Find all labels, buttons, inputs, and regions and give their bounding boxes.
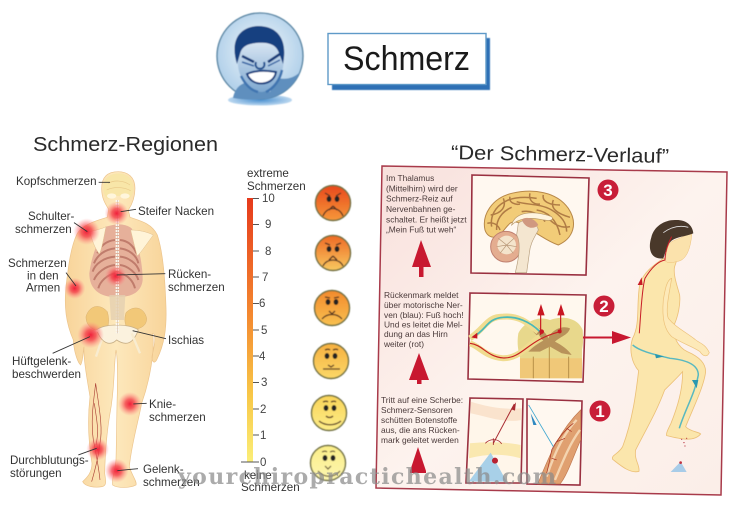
- box 2: spinal cord: [468, 293, 586, 382]
- pain scale bar: 2: [260, 404, 266, 416]
- step text 1: Schmerz-Sensoren: [381, 405, 453, 415]
- region labels: schmerzen: [168, 281, 225, 294]
- region labels: Hüftgelenk-: [12, 355, 71, 368]
- leader lines: [53, 182, 166, 471]
- step badges: 2: [599, 297, 609, 316]
- box 3: brain: [471, 175, 589, 275]
- arrows up: [409, 240, 431, 473]
- step text 3: Im Thalamus: [386, 173, 434, 183]
- step text 2: dung an das Hirn: [384, 329, 448, 339]
- step text 1: mark geleitet werden: [381, 435, 459, 445]
- step text 3: Schmerz-Reiz auf: [386, 194, 453, 204]
- pain scale bar: extreme: [247, 167, 289, 180]
- step text 3: [386, 173, 467, 234]
- pain scale bar: 0: [260, 457, 266, 469]
- body figure with pain regions: [53, 172, 166, 487]
- arrow: spinal cord to body: [583, 331, 631, 344]
- region labels: Armen: [26, 282, 60, 294]
- step text 1: [381, 395, 463, 445]
- region labels: [8, 175, 225, 489]
- pain scale bar: [241, 167, 306, 494]
- step text 2: Rückenmark meldet: [384, 290, 459, 300]
- title box: Schmerz: Schmerz: [343, 40, 470, 78]
- region labels: Kopfschmerzen: [16, 175, 97, 188]
- region labels: Steifer Nacken: [138, 205, 214, 218]
- step text 2: ven (blau): Fuß hoch!: [384, 310, 464, 320]
- body silhouette: [65, 172, 166, 487]
- region labels: Gelenk-: [143, 463, 184, 476]
- panel: pain pathway: [376, 166, 727, 495]
- step text 3: (Mittelhirn) wird der: [386, 184, 458, 194]
- pain scale bar: 10: [262, 193, 275, 205]
- woman figure: [612, 220, 709, 472]
- face 2: [312, 396, 346, 430]
- region labels: Schulter-: [28, 210, 75, 223]
- region labels: schmerzen: [149, 411, 206, 424]
- region labels: Rücken-: [168, 268, 211, 281]
- pain scale bar: 7: [262, 272, 268, 284]
- region labels: Ischias: [168, 334, 204, 347]
- watermark: yourchiropractichealth.com: [177, 464, 556, 490]
- step text 2: Und es leitet die Mel-: [384, 320, 463, 330]
- pain scale bar: 3: [261, 377, 267, 389]
- region labels: Schmerzen: [8, 257, 67, 270]
- pain spots: [64, 201, 142, 483]
- pain scale bar: 6: [259, 298, 265, 310]
- step text 2: [383, 290, 464, 349]
- step text 1: schütten Botenstoffe: [381, 415, 458, 425]
- face 10: [316, 186, 350, 220]
- step text 1: aus, die ans Rücken-: [381, 425, 460, 435]
- step text 3: Nervenbahnen ge-: [386, 204, 456, 214]
- face 0: [310, 446, 346, 480]
- step badges: [590, 180, 618, 422]
- region labels: Knie-: [149, 398, 176, 411]
- region labels: Durchblutungs-: [10, 454, 89, 467]
- pain scale bar: 9: [265, 219, 271, 231]
- region labels: schmerzen: [143, 476, 200, 489]
- pain faces: [310, 186, 350, 480]
- region labels: schmerzen: [15, 223, 72, 236]
- region labels: beschwerden: [12, 368, 81, 381]
- pain scale bar: 5: [261, 325, 267, 337]
- pain scale bar: Schmerzen: [247, 180, 306, 193]
- step text 3: „Mein Fuß tut weh“: [386, 224, 456, 234]
- step text 1: Tritt auf eine Scherbe:: [381, 395, 463, 405]
- heading: Der Schmerz-Verlauf: “Der Schmerz-Verlauf”: [451, 142, 669, 168]
- box 1a: foot sensor: [466, 398, 523, 483]
- scapulae: [90, 227, 106, 254]
- title box: Schmerz: [328, 34, 490, 90]
- face 8: [316, 236, 350, 270]
- icon: portrait of man in pain: [217, 13, 303, 106]
- step badges: 3: [603, 181, 613, 200]
- step text 2: weiter (rot): [383, 339, 424, 349]
- face 6: [314, 290, 350, 326]
- pain scale bar: Schmerzen: [241, 481, 300, 494]
- spine: [112, 200, 122, 333]
- region labels: in den: [27, 270, 59, 282]
- leg vessels: [92, 383, 101, 482]
- ribcage: [89, 224, 143, 297]
- pelvis: [86, 306, 147, 332]
- pain scale bar: 4: [259, 351, 266, 363]
- region labels: störungen: [10, 467, 62, 480]
- pain scale bar: keine: [244, 469, 272, 482]
- step text 2: über motorische Ner-: [384, 300, 463, 310]
- box 1b: nerve in leg: [527, 399, 582, 485]
- pain scale bar: 8: [265, 246, 271, 258]
- face 4: [314, 344, 348, 378]
- pain scale bar: 1: [260, 430, 266, 442]
- step badges: 1: [595, 402, 605, 421]
- step text 3: schaltet. Er heißt jetzt: [386, 214, 467, 224]
- skull: [103, 173, 133, 199]
- heading: Schmerz-Regionen: Schmerz-Regionen: [33, 134, 218, 156]
